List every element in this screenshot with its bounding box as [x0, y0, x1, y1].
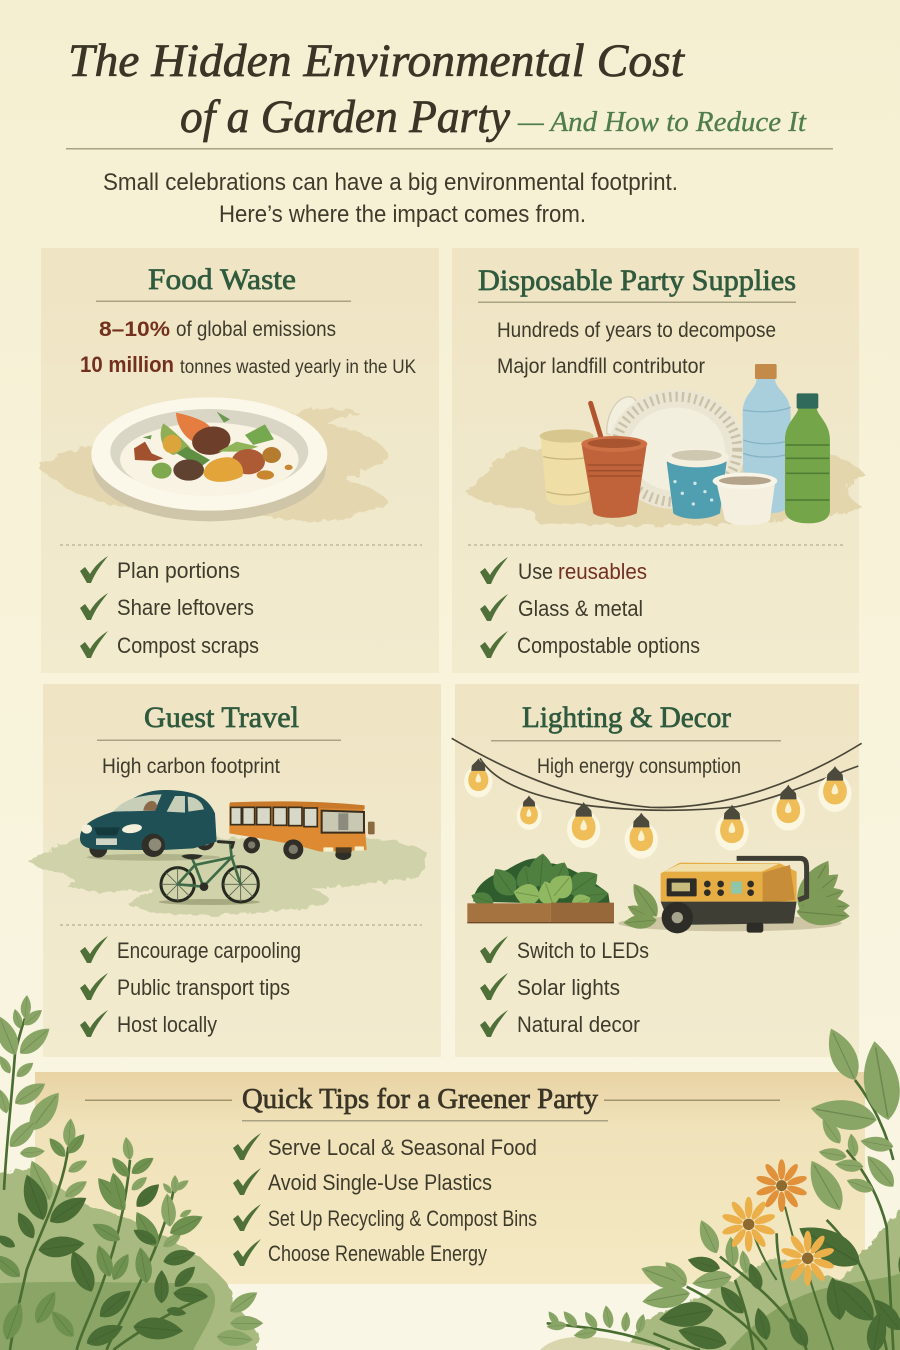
checklist: guest travel: Host locally — [117, 1012, 217, 1037]
heading: disposable party supplies: Disposable Party Supplies — [478, 264, 796, 297]
checklist: food waste: Plan portions — [117, 558, 240, 583]
title block — [66, 35, 833, 150]
checklist: guest travel: Public transport tips — [117, 975, 290, 1000]
checklist: guest travel — [80, 936, 301, 1037]
panel: quick tips — [35, 1072, 865, 1284]
checklist: quick tips: Set Up Recycling & Compost Bins — [268, 1206, 537, 1231]
stats: food waste — [80, 318, 416, 378]
foliage: bottom left — [0, 995, 263, 1350]
checklist: quick tips — [233, 1133, 537, 1266]
fact: lighting: High energy consumption — [537, 755, 741, 778]
heading: food waste: Food Waste — [148, 263, 296, 296]
facts: disposable supplies — [497, 319, 776, 378]
checklist: disposable supplies: reusables — [558, 559, 647, 584]
facts: disposable supplies: Major landfill contributor — [497, 355, 705, 378]
stats: food waste: 8–10% — [99, 318, 170, 341]
checklist: disposable supplies: Compostable options — [517, 633, 700, 658]
panel: disposable party supplies — [452, 248, 865, 673]
intro text: Here’s where the impact comes from. — [219, 201, 586, 228]
checklist: guest travel: Encourage carpooling — [117, 938, 301, 963]
checklist: lighting: Solar lights — [517, 975, 620, 1000]
checklist: quick tips: Choose Renewable Energy — [268, 1241, 487, 1266]
checklist: food waste: Share leftovers — [117, 595, 254, 620]
checklist: quick tips: Avoid Single-Use Plastics — [268, 1170, 492, 1195]
panel: guest travel — [28, 684, 441, 1057]
stats: food waste: tonnes wasted yearly in the UK — [180, 357, 416, 378]
intro text: Small celebrations can have a big environmental footprint. — [103, 169, 678, 196]
facts: disposable supplies: Hundreds of years to decompose — [497, 319, 776, 342]
checklist: quick tips: Serve Local & Seasonal Food — [268, 1135, 537, 1160]
heading: lighting and decor: Lighting & Decor — [522, 701, 731, 734]
panel: lighting and decor — [452, 684, 862, 1057]
illustration: car, bus and bicycle — [28, 790, 427, 915]
checklist: disposable supplies — [480, 557, 700, 658]
stats: food waste: 10 million — [80, 352, 174, 377]
illustration: plate of food — [38, 397, 390, 522]
panel: food waste — [38, 248, 439, 673]
checklist: disposable supplies: Glass & metal — [518, 596, 643, 621]
heading: quick tips: Quick Tips for a Greener Party — [242, 1083, 598, 1115]
checklist: food waste — [80, 556, 259, 658]
checklist: lighting: Switch to LEDs — [517, 938, 649, 963]
heading: guest travel: Guest Travel — [144, 701, 299, 734]
intro text — [103, 169, 678, 228]
illustration: disposable cups, plate and bottles — [467, 364, 865, 526]
stats: food waste: of global emissions — [176, 318, 336, 341]
foliage and flowers: bottom right — [540, 1024, 900, 1350]
checklist: lighting — [480, 936, 649, 1037]
fact: guest travel: High carbon footprint — [102, 755, 280, 778]
title block: The Hidden Environmental Cost — [68, 35, 685, 87]
checklist: food waste: Compost scraps — [117, 633, 259, 658]
checklist: disposable supplies: Use — [518, 559, 553, 584]
checklist: lighting: Natural decor — [517, 1012, 640, 1037]
illustration: string lights, planter and generator — [452, 738, 862, 933]
title block: — And How to Reduce It — [517, 106, 807, 138]
title block: of a Garden Party — [180, 91, 510, 143]
